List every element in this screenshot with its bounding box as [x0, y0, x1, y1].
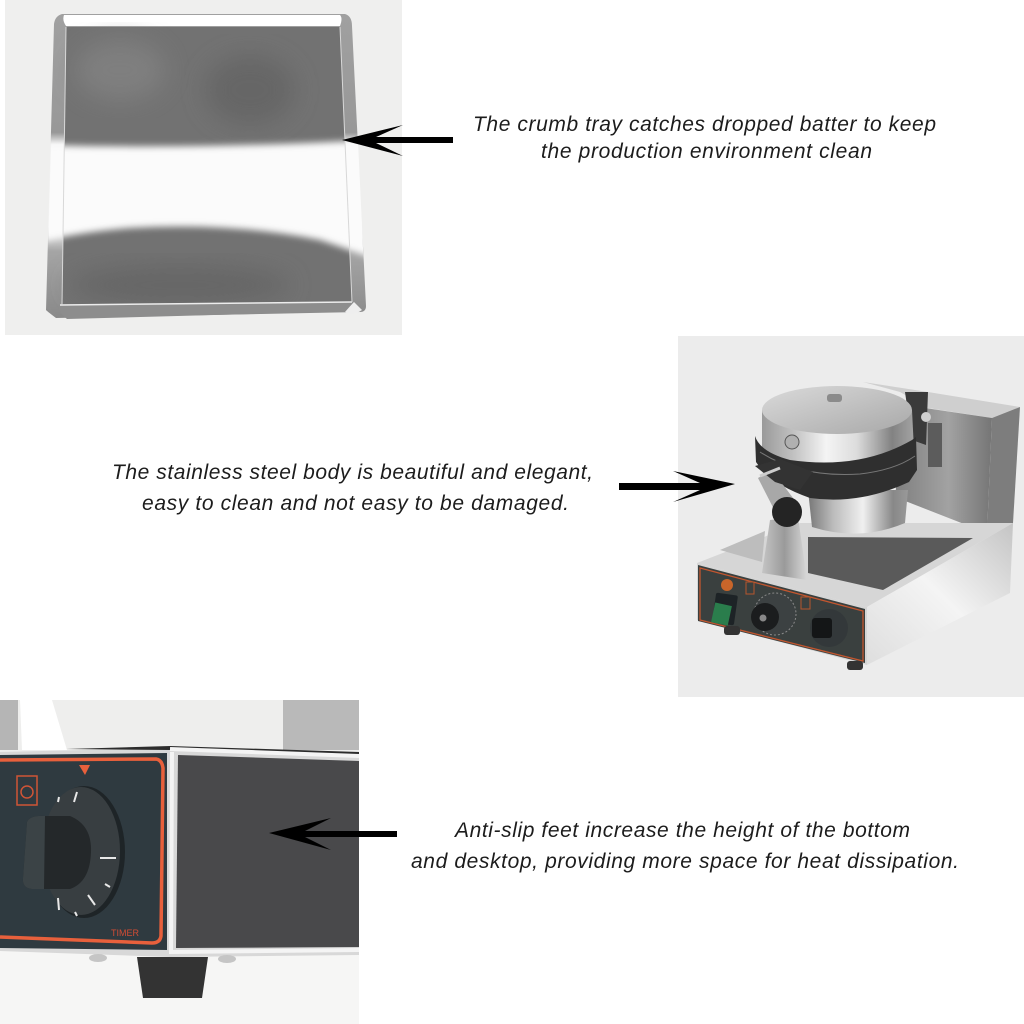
feet	[724, 626, 863, 670]
dark control panel	[0, 753, 167, 950]
support arm and handle	[755, 459, 813, 580]
panel: waffle machine photo	[619, 336, 1024, 697]
icon: timer symbol	[17, 776, 37, 805]
panel: anti-slip feet close-up photo	[0, 700, 397, 1024]
text: anti-slip feet caption: Anti-slip feet increase the height of the bottom	[453, 819, 910, 842]
text: anti-slip feet caption	[411, 819, 959, 873]
foot	[137, 957, 208, 998]
background pieces of machine	[0, 700, 359, 750]
text: stainless steel caption	[112, 461, 593, 515]
marker triangle	[79, 765, 90, 775]
panel: crumb tray photo	[5, 0, 453, 335]
waffle machine	[697, 382, 1020, 670]
base	[697, 523, 1013, 665]
black clamp band	[755, 436, 917, 500]
text: stainless steel caption: The stainless steel body is beautiful and elegant,	[112, 461, 593, 484]
screws	[89, 954, 236, 963]
text: anti-slip feet caption: and desktop, providing more space for heat dissipation.	[411, 850, 959, 873]
text: crumb tray caption: the production environment clean	[541, 140, 872, 163]
upper cylinder and lid	[762, 386, 915, 470]
arrow: points to body	[619, 471, 735, 502]
lower cylinder	[808, 490, 908, 534]
machine front edge	[0, 748, 359, 957]
label: timer: TIMER	[111, 928, 139, 938]
arrow: points to tray	[342, 125, 453, 156]
crumb tray	[40, 14, 372, 319]
controls	[711, 579, 848, 647]
dark side face	[176, 755, 359, 948]
timer knob	[23, 786, 125, 918]
back housing	[863, 382, 1020, 533]
text: crumb tray caption: The crumb tray catches dropped batter to keep	[473, 113, 936, 136]
arrow: points to side face	[269, 818, 397, 850]
text: stainless steel caption: easy to clean and not easy to be damaged.	[142, 492, 569, 515]
text: crumb tray caption	[473, 113, 936, 163]
